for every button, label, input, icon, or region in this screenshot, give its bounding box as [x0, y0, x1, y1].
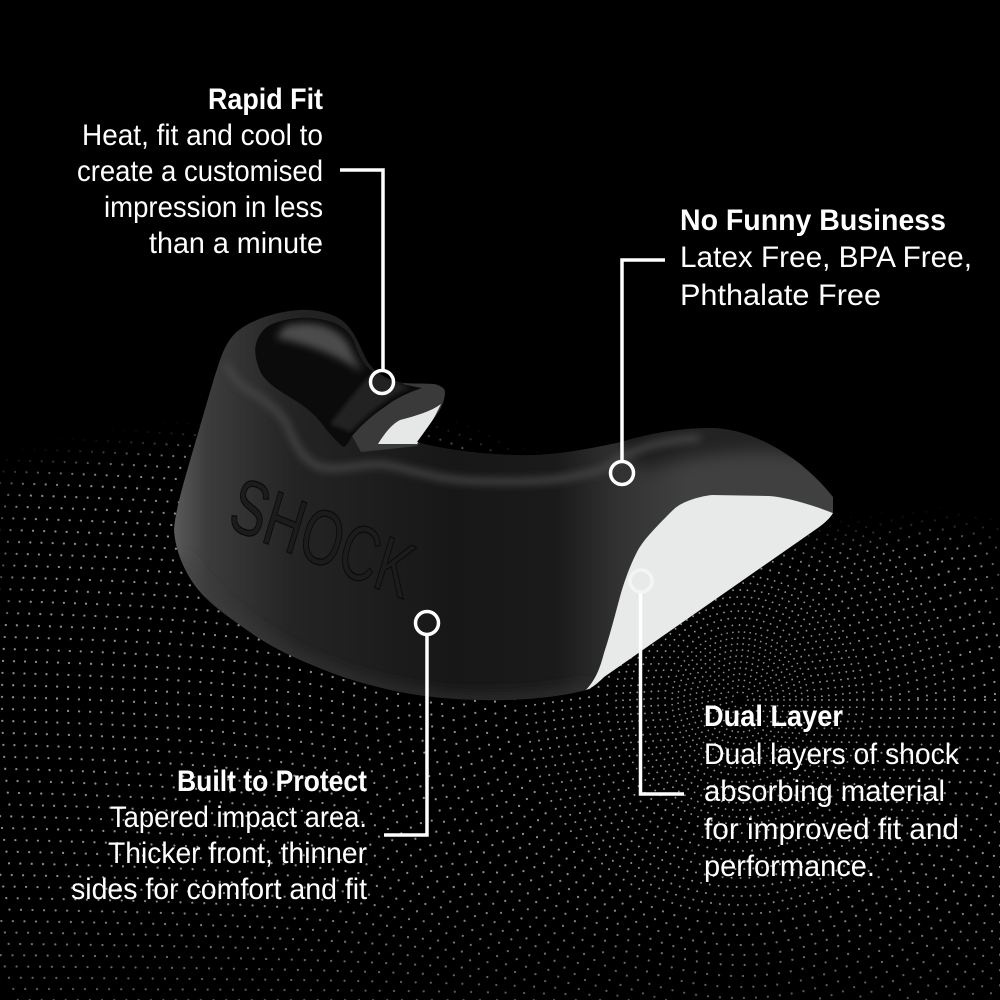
- embossed logo: SHOCK: [221, 460, 424, 615]
- text: no funny business: Latex Free, BPA Free,: [680, 241, 972, 274]
- upper right shading: [618, 428, 792, 471]
- text: dual layer: [704, 700, 960, 883]
- dotted wave field: [0, 422, 1000, 1000]
- white layer: [586, 495, 833, 690]
- callout: rapid fit connector: [340, 170, 394, 394]
- far tray lobe: [350, 383, 447, 452]
- text: no funny business: [680, 204, 972, 312]
- text: no funny business: No Funny Business: [680, 204, 946, 237]
- text: rapid fit: create a customised: [77, 155, 323, 188]
- text: rapid fit: [77, 83, 323, 260]
- text: dual layer: Dual layers of shock: [704, 738, 960, 771]
- inner wall sheen: [330, 372, 410, 432]
- callout: dual layer connector: [630, 570, 684, 794]
- text: dual layer: for improved fit and: [704, 813, 959, 846]
- text: no funny business: Phthalate Free: [680, 279, 881, 312]
- text: dual layer: Dual Layer: [704, 700, 843, 733]
- text: built to protect: Thicker front, thinner: [108, 837, 367, 870]
- mouthguard body: [160, 300, 850, 710]
- text: built to protect: [71, 765, 368, 906]
- text: built to protect: Built to Protect: [177, 765, 367, 798]
- text: built to protect: sides for comfort and fit: [71, 873, 368, 906]
- text: dual layer: absorbing material: [704, 775, 945, 808]
- text: built to protect: Tapered impact area.: [110, 801, 367, 834]
- callout: built to protect connector: [384, 612, 438, 835]
- text: rapid fit: than a minute: [149, 227, 323, 260]
- text: rapid fit: impression in less: [104, 191, 323, 224]
- text: rapid fit: Rapid Fit: [208, 83, 323, 116]
- far tray white layer: [378, 404, 441, 444]
- text: rapid fit: Heat, fit and cool to: [82, 119, 323, 152]
- cavity sheen: [276, 323, 362, 372]
- callout: no funny business connector: [610, 260, 665, 484]
- mouthguard: [174, 310, 833, 700]
- front rim highlight: [226, 363, 700, 482]
- bottom edge sheen: [256, 636, 584, 700]
- inner cavity: [255, 318, 422, 447]
- text: dual layer: performance.: [704, 850, 875, 883]
